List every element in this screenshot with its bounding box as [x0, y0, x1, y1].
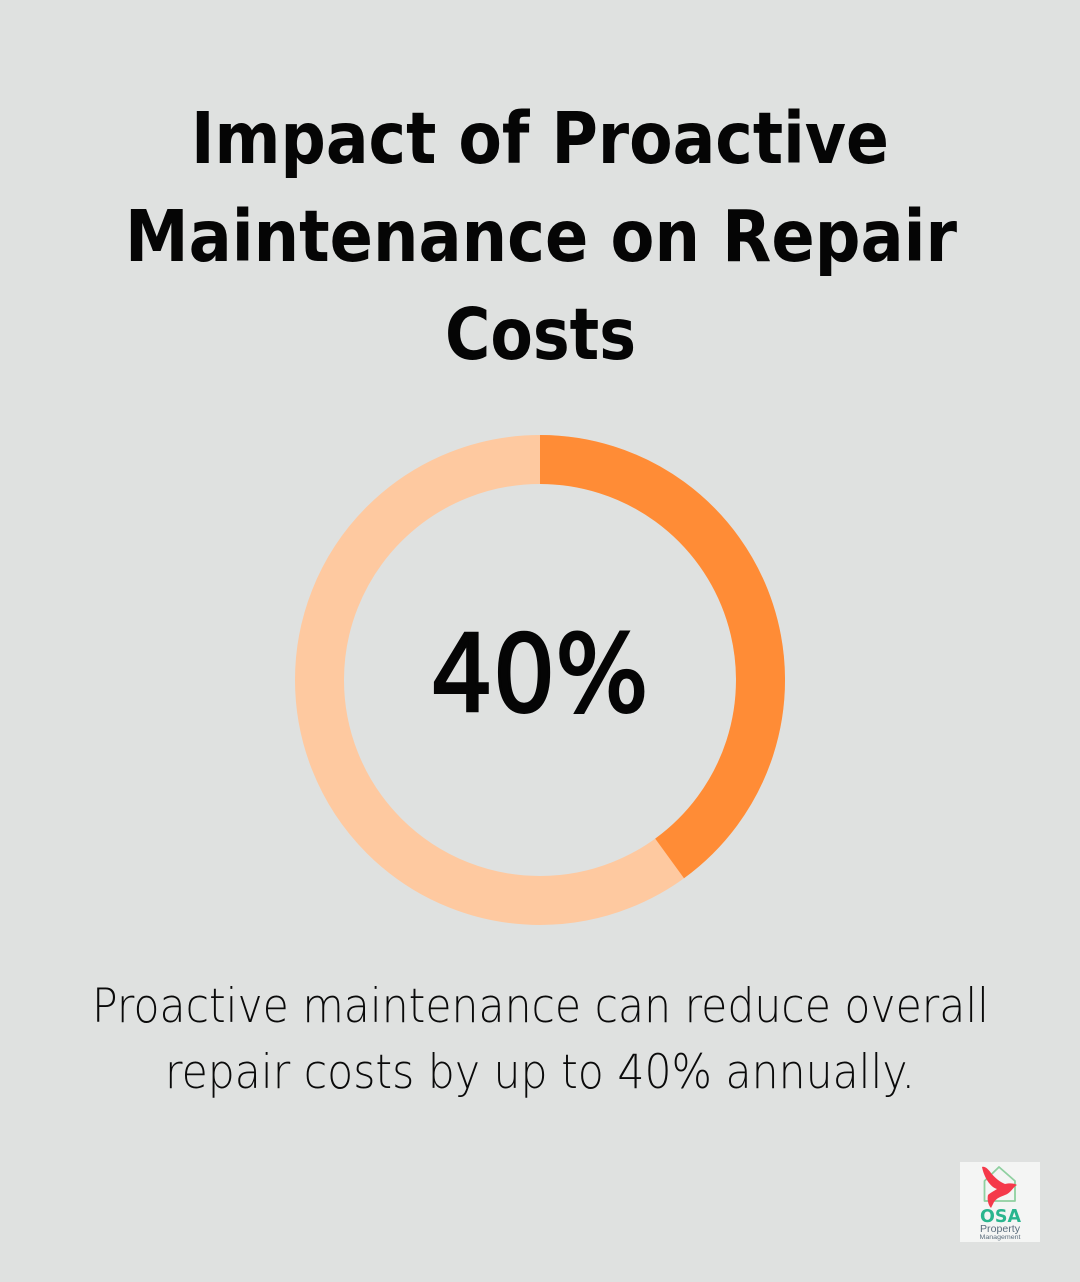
logo: OSA Property Management [960, 1162, 1040, 1242]
center value: 40% [430, 613, 648, 736]
logo text Property: Property [980, 1224, 1020, 1235]
title: Costs [445, 293, 636, 376]
icon: house outline [984, 1167, 1015, 1201]
description text: repair costs by up to 40% annually. [165, 1045, 915, 1100]
description text: Proactive maintenance can reduce overall [92, 979, 989, 1034]
donut 40 percent arc [540, 460, 761, 858]
logo text Management: Management [980, 1235, 1021, 1241]
title: Impact of Proactive [191, 97, 889, 180]
description text [92, 979, 989, 1100]
icon: red bird [982, 1167, 1017, 1208]
title: Maintenance on Repair [125, 195, 957, 278]
logo wordmark OSA: OSA [980, 1206, 1021, 1227]
donut remainder ring [320, 460, 760, 900]
logo background [960, 1162, 1040, 1242]
donut chart: 40 percent [320, 460, 761, 900]
title [125, 97, 957, 376]
